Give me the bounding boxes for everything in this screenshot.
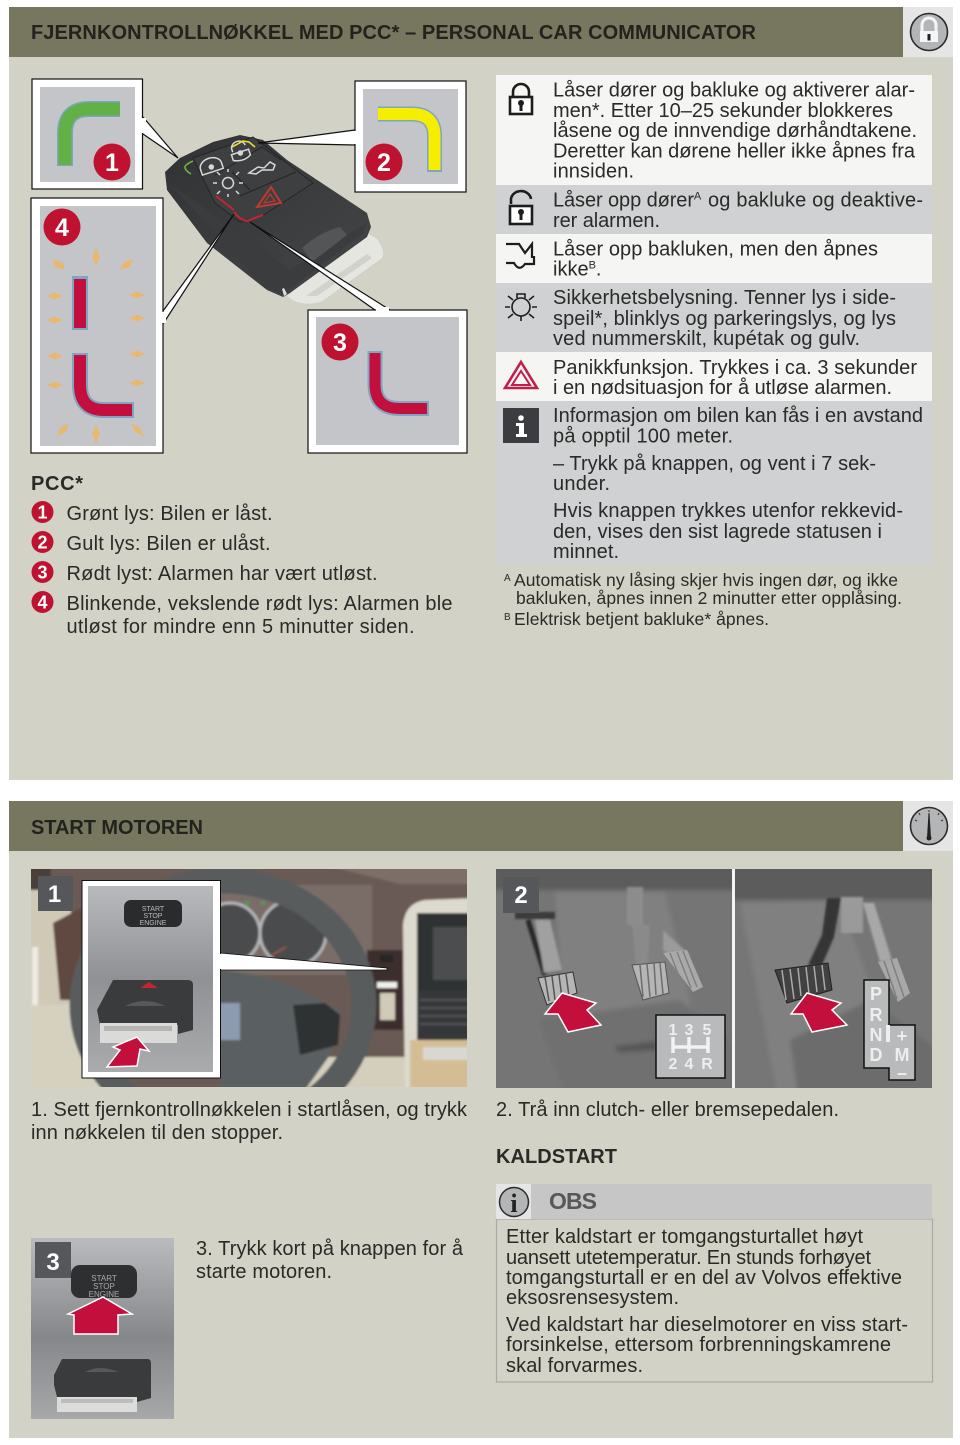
note box: OBS: tomgangsturtall er en del av Volvos effektive xyxy=(506,1267,902,1289)
callout: lights box 3 red xyxy=(250,222,467,453)
arrow: press clutch xyxy=(545,993,601,1032)
photo inset: key slot xyxy=(82,880,387,1078)
legend item 2: Gult lys: Bilen er ulåst. xyxy=(66,533,270,555)
legend item 3: Rødt lyst: Alarmen har vært utløst. xyxy=(66,563,378,585)
row: lock: men*. Etter 10–25 sekunder blokkeres xyxy=(553,100,893,122)
gear selector: R xyxy=(870,1005,882,1025)
row: lock: Låser dører og bakluke og aktiverer alar- xyxy=(553,80,915,102)
row: lock xyxy=(496,75,932,185)
row: information: den, vises den sist lagrede statusen i xyxy=(553,521,882,543)
gear selector: M xyxy=(894,1045,910,1065)
gear selector: N xyxy=(870,1025,882,1045)
step badge 3: 3 xyxy=(46,1249,60,1276)
start button: STOP xyxy=(93,1282,115,1291)
gear selector: – xyxy=(897,1063,907,1083)
row: information: minnet. xyxy=(553,541,619,563)
heading: cold start: KALDSTART xyxy=(496,1146,617,1168)
divider xyxy=(732,869,735,1088)
icon: padlock badge xyxy=(903,7,953,57)
start button: START xyxy=(142,906,165,913)
function table xyxy=(496,75,932,565)
callout: lights box 1 green xyxy=(32,79,178,189)
start button: START xyxy=(91,1274,117,1283)
gear pattern: 2 xyxy=(669,1056,678,1073)
note box: OBS: forsinkelse, ettersom forbrenningskamrene xyxy=(506,1334,891,1356)
caption: step 1: inn nøkkelen til den stopper. xyxy=(31,1122,283,1144)
step badge 2 xyxy=(503,886,539,913)
legend: PCC: PCC* xyxy=(31,473,83,495)
start button xyxy=(71,1265,137,1299)
gear pattern: R xyxy=(701,1056,713,1073)
start button: STOP xyxy=(144,913,163,920)
start button: ENGINE xyxy=(89,1290,119,1299)
number badge 1: 1 xyxy=(105,149,119,177)
row: lock: Deretter kan dørene heller ikke åpnes fra xyxy=(553,140,916,162)
icon: info circle xyxy=(496,1184,531,1219)
arrow: push key xyxy=(107,1037,149,1067)
step badge 2: 2 xyxy=(514,882,528,909)
caption: step 3 xyxy=(196,1238,464,1283)
row: tailgate: ikke xyxy=(553,258,589,280)
footnotes: Automatisk ny låsing skjer hvis ingen dør, og ikke xyxy=(514,570,898,590)
panel: start engine xyxy=(9,801,953,1438)
row: approach light xyxy=(496,283,932,352)
illustration: key fob xyxy=(165,135,384,304)
start button xyxy=(124,900,182,927)
row: panic: i en nødsituasjon for å utløse alarmen. xyxy=(553,377,892,399)
arrow: press brake xyxy=(791,993,847,1032)
note box: OBS: skal forvarmes. xyxy=(506,1355,643,1377)
gear pattern: 1 xyxy=(669,1022,678,1039)
row: lock: låsene og de innvendige dørhåndtakene. xyxy=(553,120,917,142)
row: unlock: A xyxy=(694,190,702,202)
heading: start engine: START MOTOREN xyxy=(31,817,203,839)
key fob in slot xyxy=(97,980,193,1043)
panel: remote key xyxy=(9,7,953,780)
row: unlock: og bakluke og deaktive- xyxy=(708,190,923,212)
row: tailgate: B xyxy=(589,260,596,272)
icon: light xyxy=(505,294,537,321)
footnotes: A xyxy=(504,573,511,584)
arrow: press button xyxy=(68,1297,132,1334)
note box: OBS xyxy=(496,1184,932,1382)
legend item 3: 3 xyxy=(37,562,48,582)
step badge 1: 1 xyxy=(48,881,61,908)
row: information xyxy=(496,401,932,565)
flashing rays xyxy=(47,248,145,444)
row: information: under. xyxy=(553,473,610,495)
photo: step 3 start button xyxy=(31,1238,174,1419)
legend: PCC xyxy=(31,473,452,638)
gear selector: + xyxy=(897,1026,907,1046)
legend item 4: utløst for mindre enn 5 minutter siden. xyxy=(66,616,414,638)
gear selector: D xyxy=(870,1045,882,1065)
number badge 3 xyxy=(322,324,358,360)
photo: step 2 clutch pedals xyxy=(496,869,732,1088)
number badge 4: 4 xyxy=(55,214,69,242)
row: unlock: Låser opp dører xyxy=(553,190,694,212)
caption: step 3: starte motoren. xyxy=(196,1261,332,1283)
photo: brake pedals xyxy=(735,869,932,1088)
caption: step 3: 3. Trykk kort på knappen for å xyxy=(196,1238,464,1260)
icon: hazard triangle xyxy=(505,362,537,388)
icon: information square xyxy=(503,408,539,443)
gear pattern xyxy=(656,1015,725,1078)
number badge 1 xyxy=(94,144,130,180)
gear pattern: 5 xyxy=(703,1022,712,1039)
footnotes xyxy=(504,570,902,629)
number badge 2 xyxy=(366,144,402,180)
legend item 4: Blinkende, vekslende rødt lys: Alarmen ble xyxy=(66,593,452,615)
row: panic: Panikkfunksjon. Trykkes i ca. 3 sekunder xyxy=(553,357,917,379)
step badge 1 xyxy=(38,876,73,911)
heading: remote key: FJERNKONTROLLNØKKEL MED PCC* – PERSONAL CAR COMMUNICATOR xyxy=(31,22,757,44)
caption: step 2: 2. Trå inn clutch- eller bremsepedalen. xyxy=(496,1099,839,1121)
gear pattern: 4 xyxy=(685,1056,694,1073)
row: information: Informasjon om bilen kan fås i en avstand xyxy=(553,405,923,427)
row: information: på opptil 100 meter. xyxy=(553,426,733,448)
row: unlock: rer alarmen. xyxy=(553,210,660,232)
icon: tailgate xyxy=(506,244,534,268)
legend item 2: 2 xyxy=(37,532,48,552)
note box: OBS: Ved kaldstart har dieselmotorer en viss start- xyxy=(506,1314,908,1336)
row: tailgate: Låser opp bakluken, men den åpnes xyxy=(553,238,878,260)
photo: step 1 dashboard xyxy=(31,869,467,1087)
row: approach light: speil*, blinklys og parkeringslys, og lys xyxy=(553,308,896,330)
row: lock: innsiden. xyxy=(553,160,634,182)
row: tailgate: . xyxy=(596,258,601,280)
gear selector: P xyxy=(870,984,882,1004)
icon: open lock xyxy=(510,191,532,224)
note box: OBS: OBS xyxy=(549,1188,597,1214)
legend item 1: Grønt lys: Bilen er låst. xyxy=(66,503,272,525)
heading: start engine xyxy=(9,801,903,851)
number badge 3: 3 xyxy=(333,329,347,357)
icon: gauge badge xyxy=(903,801,953,851)
caption: step 1: 1. Sett fjernkontrollnøkkelen i startlåsen, og trykk xyxy=(31,1099,468,1121)
legend item 1: 1 xyxy=(37,502,48,522)
number badge 2: 2 xyxy=(377,149,391,177)
key fob xyxy=(54,1359,151,1412)
row: tailgate xyxy=(496,234,932,283)
row: approach light: ved nummerskilt, kupétak og gulv. xyxy=(553,328,860,350)
row: panic xyxy=(496,352,932,401)
icon: info circle: i xyxy=(510,1189,518,1218)
note box: OBS: uansett utetemperatur. En stunds forhøyet xyxy=(506,1247,871,1269)
note box: OBS: eksosrensesystem. xyxy=(506,1287,679,1309)
row: information: – Trykk på knappen, og vent i 7 sek- xyxy=(553,453,876,475)
footnotes: B xyxy=(504,612,511,623)
heading: remote key xyxy=(9,7,903,57)
start button: ENGINE xyxy=(140,920,167,927)
icon: closed lock xyxy=(510,84,532,114)
gear selector xyxy=(864,980,915,1083)
number badge 4 xyxy=(44,208,80,246)
legend item 4: 4 xyxy=(37,592,48,612)
row: approach light: Sikkerhetsbelysning. Tenner lys i side- xyxy=(553,287,896,309)
footnotes: bakluken, åpnes innen 2 minutter etter opplåsing. xyxy=(516,588,902,608)
gear pattern: 3 xyxy=(685,1022,694,1039)
footnotes: Elektrisk betjent bakluke* åpnes. xyxy=(514,609,769,629)
fob button icons xyxy=(198,139,275,197)
row: information: Hvis knappen trykkes utenfor rekkevid- xyxy=(553,500,903,522)
callout: lights box 4 flashing red xyxy=(31,198,234,453)
step badge 3 xyxy=(35,1242,71,1278)
row: unlock xyxy=(496,185,932,234)
note box: OBS: Etter kaldstart er tomgangsturtallet høyt xyxy=(506,1226,863,1248)
caption: step 1 xyxy=(31,1099,468,1144)
callout: lights box 2 yellow xyxy=(258,81,466,192)
legend item 4 xyxy=(32,591,452,638)
